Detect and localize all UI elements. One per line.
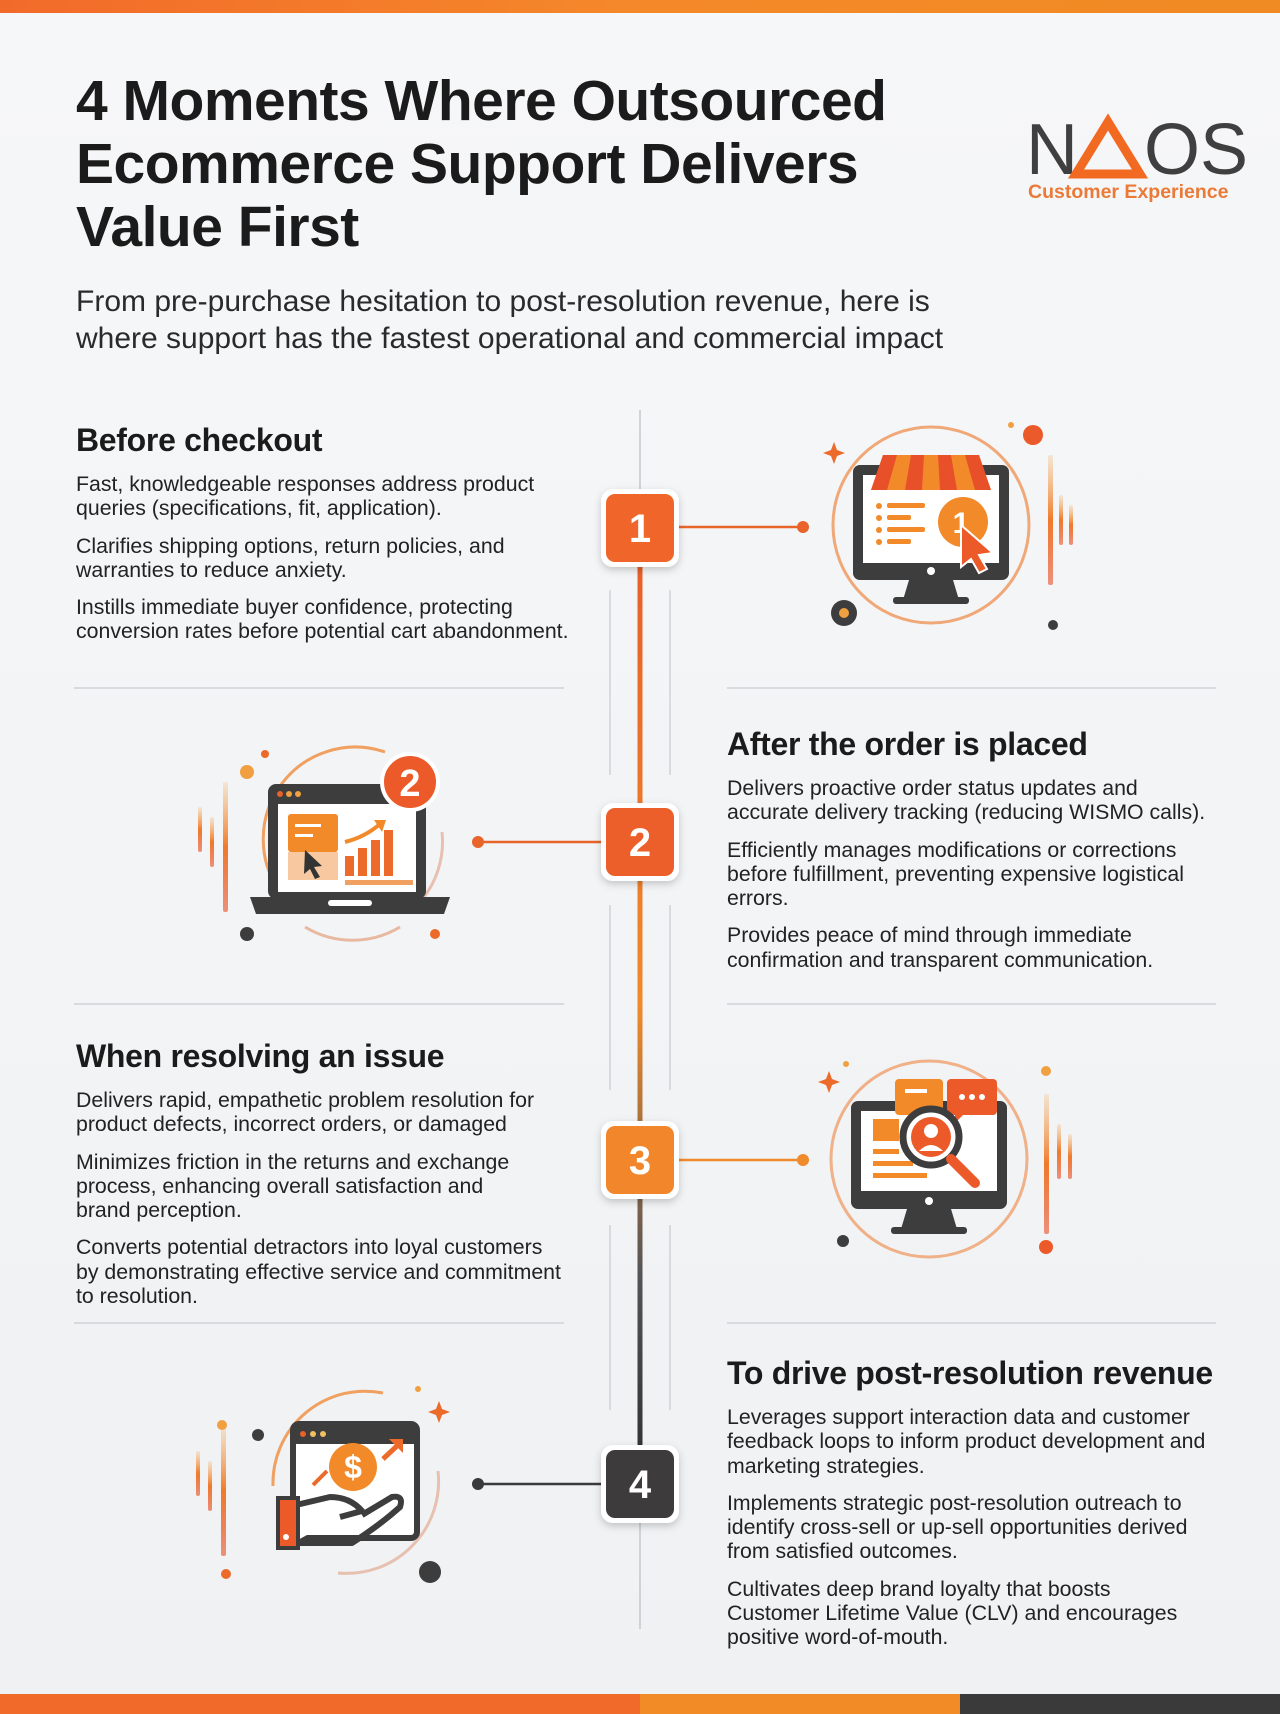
section 3 text: brand perception.: [76, 1198, 242, 1222]
subtitle: From pre-purchase hesitation to post-resolution revenue, here is: [76, 285, 930, 318]
subtitle: where support has the fastest operational and commercial impact: [76, 322, 943, 355]
section 4 heading: To drive post-resolution revenue: [727, 1355, 1213, 1391]
section 4 text: positive word-of-mouth.: [727, 1625, 948, 1649]
section 3 text: [76, 1088, 561, 1308]
section 3 text: by demonstrating effective service and commitment: [76, 1260, 561, 1284]
section 2 text: Efficiently manages modifications or corrections: [727, 838, 1176, 862]
section 2 text: before fulfillment, preventing expensive logistical: [727, 862, 1184, 886]
section 3 text: product defects, incorrect orders, or damaged: [76, 1112, 507, 1136]
icon 1: storefront monitor: 1: [953, 507, 969, 540]
section 1 heading: Before checkout: [76, 422, 322, 458]
section 2 text: errors.: [727, 886, 789, 910]
section 4 text: Leverages support interaction data and customer: [727, 1405, 1190, 1429]
icon 2: laptop analytics: 2: [399, 763, 421, 805]
section 4 text: Cultivates deep brand loyalty that boosts: [727, 1577, 1111, 1601]
logo: N: [1026, 110, 1078, 190]
badges: [601, 489, 679, 1523]
title: Ecommerce Support Delivers: [76, 132, 858, 196]
icon 3: monitor search: [818, 1061, 1072, 1257]
top bar: [0, 0, 1280, 13]
section 4 text: Customer Lifetime Value (CLV) and encourages: [727, 1601, 1177, 1625]
icon 2: laptop analytics: [198, 747, 450, 941]
section 1 text: conversion rates before potential cart abandonment.: [76, 619, 569, 643]
dividers: [74, 688, 1216, 1323]
title: Value First: [76, 195, 359, 259]
section 2 heading: After the order is placed: [727, 726, 1088, 762]
section 1 text: Fast, knowledgeable responses address product: [76, 472, 534, 496]
section 1 text: Instills immediate buyer confidence, protecting: [76, 595, 513, 619]
section 2 text: Delivers proactive order status updates and: [727, 776, 1138, 800]
section 2 text: accurate delivery tracking (reducing WISMO calls).: [727, 800, 1205, 824]
badges: 4: [629, 1463, 652, 1507]
section 4 text: identify cross-sell or up-sell opportunities derived: [727, 1515, 1187, 1539]
logo: [1026, 110, 1248, 203]
icon 4: hand with dollar: $: [344, 1449, 362, 1485]
section 3 text: Minimizes friction in the returns and exchange: [76, 1150, 509, 1174]
subtitle: [76, 285, 943, 355]
title: [76, 69, 886, 259]
badges: 3: [629, 1139, 651, 1183]
section 3 text: Delivers rapid, empathetic problem resolution for: [76, 1088, 534, 1112]
section 2 text: confirmation and transparent communication.: [727, 948, 1153, 972]
section 4 text: feedback loops to inform product development and: [727, 1429, 1205, 1453]
icon 4: hand with dollar: [196, 1386, 450, 1583]
logo: OS: [1144, 110, 1248, 190]
badges: 2: [629, 821, 651, 865]
section 4 text: [727, 1405, 1205, 1649]
badges: 1: [629, 507, 651, 551]
section 1 text: Clarifies shipping options, return policies, and: [76, 534, 505, 558]
section 2 text: Provides peace of mind through immediate: [727, 923, 1132, 947]
title: 4 Moments Where Outsourced: [76, 69, 886, 133]
section 2 text: [727, 776, 1205, 972]
bottom bar: [0, 1694, 1280, 1714]
section 3 text: process, enhancing overall satisfaction and: [76, 1174, 483, 1198]
section 1 text: queries (specifications, fit, application).: [76, 496, 442, 520]
section 4 text: from satisfied outcomes.: [727, 1539, 958, 1563]
section 3 text: Converts potential detractors into loyal customers: [76, 1235, 542, 1259]
timeline: [610, 410, 670, 1629]
section 3 heading: When resolving an issue: [76, 1038, 444, 1074]
section 3 text: to resolution.: [76, 1284, 198, 1308]
section 4 text: Implements strategic post-resolution outreach to: [727, 1491, 1182, 1515]
section 1 text: warranties to reduce anxiety.: [76, 558, 347, 582]
icon 1: storefront monitor: [823, 422, 1073, 630]
section 1 text: [76, 472, 569, 643]
logo: Customer Experience: [1028, 181, 1229, 203]
connectors: [472, 521, 809, 1490]
section 4 text: marketing strategies.: [727, 1454, 925, 1478]
